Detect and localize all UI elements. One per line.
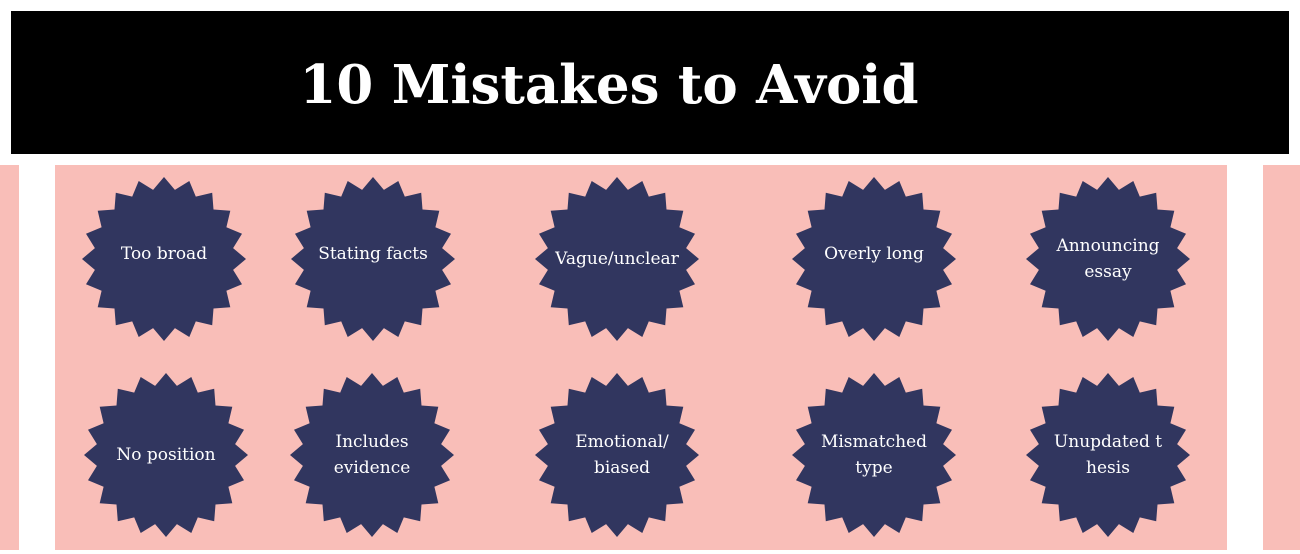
badge: Unupdated thesis: hesis [1086,458,1130,478]
badge: Too broad: Too broad [121,244,207,264]
badge: Announcing essay: Announcing [1055,236,1160,256]
badge: Unupdated thesis [1026,373,1190,537]
badge: Vague/unclear: Vague/unclear [554,249,680,269]
badge: Announcing essay: essay [1084,262,1132,282]
badge: Includes evidence [290,373,454,537]
badge: No position [84,373,248,537]
badge: Mismatched type: Mismatched [821,432,927,452]
badge: Too broad [82,177,246,341]
badge: Overly long: Overly long [824,244,924,264]
badge: Vague/unclear [535,177,699,341]
badge: Overly long [792,177,956,341]
badge: Mismatched type [792,373,956,537]
badge: Emotional/biased: Emotional/ [575,432,669,452]
badge: Emotional/biased [535,373,699,537]
badge: Emotional/biased: biased [594,458,650,478]
left pink strip [0,165,19,550]
badge: Mismatched type: type [855,458,893,478]
badge: Announcing essay [1026,177,1190,341]
badge: Stating facts [291,177,455,341]
badge: Stating facts: Stating facts [318,244,428,264]
right pink strip [1263,165,1300,550]
badge: Includes evidence: Includes [335,432,409,452]
badge: Unupdated thesis: Unupdated t [1054,432,1162,452]
title: 10 Mistakes to Avoid [300,54,918,116]
panel: mistakes [55,165,1227,550]
badge: Includes evidence: evidence [334,458,410,478]
header bar [11,11,1289,154]
badge: No position: No position [116,445,216,465]
